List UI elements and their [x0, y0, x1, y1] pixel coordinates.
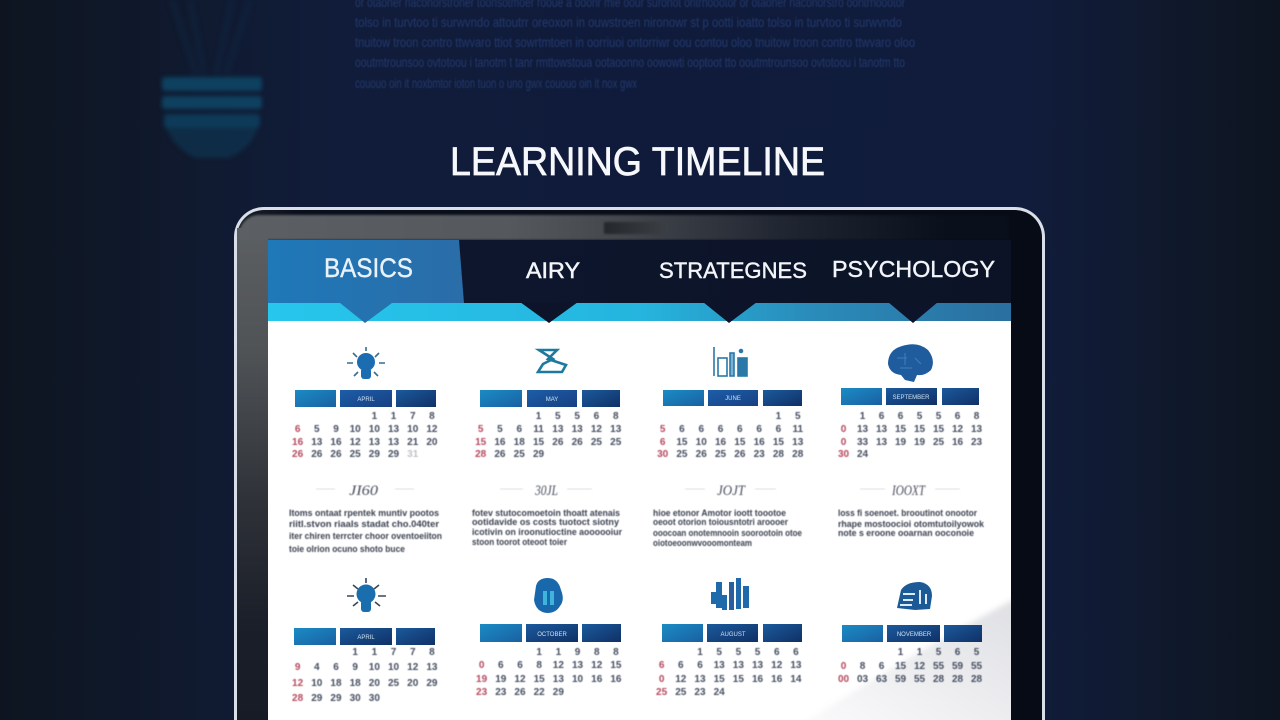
calendar grid: top column 3: 6	[776, 424, 781, 435]
calendar grid: top column 1	[292, 411, 438, 460]
calendar grid: top column 4: 0	[841, 424, 846, 435]
calendar grid: top column 1: 10	[350, 424, 361, 435]
calendar grid: top column 1: 13	[388, 437, 399, 448]
calendar grid: lower column 1: 1	[352, 647, 358, 658]
calendar header: column 1	[295, 390, 436, 407]
calendar grid: lower column 2: 8	[594, 647, 600, 658]
calendar grid: lower column 1: 30	[350, 693, 361, 704]
body text column 1	[289, 508, 442, 554]
faded background text block: ooutmtrounsoo ovtotoou i tanotm t tanr rmttowstoua ootaoonno oowowti ooptoot tto ooutmtrounsoo ovtotoou i tanotm tto	[355, 54, 905, 70]
calendar grid: top column 1: 26	[330, 449, 342, 460]
calendar grid: top column 2: 29	[533, 449, 544, 460]
calendar grid: lower column 1: 7	[410, 647, 416, 658]
body text column 2: ootidavide os costs tuotoct siotny	[472, 517, 619, 527]
calendar grid: top column 1: 16	[292, 437, 303, 448]
calendar grid: top column 3: 6	[660, 437, 665, 448]
body text column 3	[653, 508, 802, 548]
calendar grid: top column 2: 6	[516, 424, 522, 435]
calendar grid: top column 3: 10	[696, 437, 707, 448]
calendar grid: lower column 3: 12	[675, 674, 686, 685]
calendar grid: top column 1: 29	[369, 449, 380, 460]
calendar grid: lower column 3	[656, 647, 802, 698]
calendar grid: lower column 1: 4	[314, 662, 320, 673]
calendar grid: top column 4: 1	[860, 411, 865, 422]
calendar grid: lower column 4: 8	[860, 660, 865, 672]
calendar grid: top column 2: 13	[572, 424, 583, 435]
calendar grid: top column 3: 6	[698, 424, 704, 435]
body text column 4	[838, 508, 985, 538]
calendar grid: top column 4: 25	[933, 437, 944, 448]
faded background text block	[355, 0, 915, 92]
calendar grid: lower column 2: 0	[479, 660, 484, 671]
calendar grid: top column 3: 5	[660, 424, 665, 435]
calendar grid: top column 2: 11	[533, 424, 544, 435]
calendar grid: lower column 4: 59	[895, 674, 906, 685]
calendar grid: lower column 2	[476, 647, 622, 698]
icon: bars bottom	[711, 578, 749, 610]
calendar grid: lower column 1: 20	[407, 678, 418, 689]
calendar grid: lower column 1: 10	[369, 662, 380, 673]
calendar grid: top column 4: 6	[898, 411, 903, 422]
calendar grid: lower column 4	[838, 647, 982, 685]
calendar header: column 3: JUNE	[725, 396, 741, 402]
calendar grid: top column 1: 1	[391, 411, 396, 422]
body text column 1: riitl.stvon riaals stadat cho.040ter	[289, 519, 440, 529]
calendar grid: lower column 2: 16	[610, 674, 621, 685]
calendar grid: top column 1: 13	[369, 437, 380, 448]
calendar grid: top column 3: 15	[734, 437, 745, 448]
calendar grid: top column 4: 15	[933, 424, 944, 435]
calendar grid: top column 1: 13	[388, 424, 399, 435]
calendar grid: lower column 2: 23	[476, 687, 487, 698]
body text column 2: fotev stutocomoetoin thoatt atenais	[472, 508, 620, 518]
calendar grid: top column 1: 9	[333, 424, 339, 435]
calendar grid: lower column 2: 22	[534, 687, 545, 698]
calendar grid: lower column 1: 18	[350, 678, 361, 689]
calendar grid: top column 4: 13	[857, 424, 868, 435]
calendar grid: top column 3: 6	[756, 424, 762, 435]
tab label: basics: BASICS	[324, 253, 413, 283]
calendar grid: lower column 4: 63	[876, 674, 887, 685]
calendar grid: top column 4: 12	[952, 424, 963, 435]
calendar grid: lower column 3: 16	[752, 674, 763, 685]
calendar grid: top column 2: 25	[591, 437, 602, 448]
calendar grid: top column 4: 33	[857, 437, 868, 448]
calendar grid: lower column 4: 55	[933, 660, 944, 672]
body text column 3: hioe etonor Amotor ioott toootoe	[653, 508, 786, 518]
calendar grid: lower column 1: 12	[292, 678, 303, 689]
calendar header: column 2	[480, 390, 620, 407]
calendar grid: lower column 4: 55	[914, 674, 925, 685]
calendar grid: top column 1: 6	[295, 424, 300, 435]
body text column 4: rhape mostoocioi otomtutoilyowok	[838, 519, 985, 529]
faded lightbulb	[160, 74, 264, 158]
calendar grid: lower column 2: 29	[553, 687, 564, 698]
calendar grid: lower column 1: 28	[292, 693, 303, 704]
calendar grid: top column 4: 0	[841, 437, 846, 448]
calendar grid: lower column 3: 12	[771, 660, 782, 671]
calendar grid: lower column 2: 15	[534, 674, 545, 685]
calendar grid: lower column 3: 13	[790, 660, 801, 671]
calendar header: lower column 3: AUGUST	[720, 632, 746, 638]
calendar grid: top column 3	[656, 411, 804, 460]
date divider lines	[316, 488, 960, 490]
calendar grid: top column 2: 16	[494, 437, 506, 448]
calendar grid: lower column 2: 12	[591, 660, 602, 671]
calendar grid: top column 2: 26	[572, 437, 583, 448]
calendar grid: lower column 4: 03	[857, 674, 868, 685]
icon: chart top	[714, 347, 747, 376]
calendar grid: top column 1: 31	[407, 449, 418, 460]
calendar grid: top column 3: 13	[792, 437, 803, 448]
calendar grid: top column 1: 10	[407, 424, 418, 435]
faded background text block: tnuitow troon contro ttwvaro ttiot sowrtmtoen in oorriuoi ontorriwr oou contou oloo tnuitow troon contro ttwvaro oloo	[355, 34, 915, 50]
calendar grid: lower column 2: 19	[495, 674, 506, 685]
calendar header: lower column 1	[294, 628, 435, 645]
calendar grid: top column 1: 29	[388, 449, 399, 460]
date label column 1: JI60	[349, 483, 379, 499]
calendar grid: top column 4: 13	[971, 424, 982, 435]
body text column 3: oeoot otorion toiousntotri aroooer	[653, 517, 788, 527]
calendar grid: top column 1: 7	[410, 411, 416, 422]
calendar grid: top column 3: 25	[715, 449, 726, 460]
calendar grid: top column 1: 8	[429, 411, 435, 422]
calendar grid: lower column 2: 6	[498, 660, 504, 671]
body text column 1: Itoms ontaat rpentek muntiv pootos	[289, 508, 439, 518]
calendar grid: top column 3: 16	[754, 437, 765, 448]
calendar grid: top column 2: 5	[574, 411, 580, 422]
calendar grid: top column 2: 15	[533, 437, 544, 448]
calendar grid: top column 2: 5	[497, 424, 503, 435]
calendar grid: top column 2	[474, 411, 622, 460]
calendar grid: lower column 3: 13	[694, 674, 706, 685]
calendar grid: lower column 4: 28	[933, 674, 944, 685]
calendar grid: lower column 1: 30	[369, 693, 380, 704]
calendar grid: lower column 1: 12	[407, 662, 418, 673]
calendar grid: lower column 3: 6	[659, 660, 664, 671]
date label column 3: JOJT	[717, 483, 746, 499]
date label column 4: IOOXT	[891, 483, 926, 499]
calendar grid: lower column 3: 6	[678, 660, 684, 671]
laptop frame	[234, 207, 1045, 720]
calendar grid: lower column 1: 10	[311, 678, 322, 689]
calendar header: lower column 2: OCTOBER	[537, 632, 567, 638]
calendar grid: top column 2: 5	[478, 424, 483, 435]
body text column 4: loss fi soenoet. brooutinot onootor	[838, 508, 977, 518]
calendar grid: top column 2: 12	[591, 424, 602, 435]
calendar grid: top column 3: 6	[679, 424, 685, 435]
calendar grid: lower column 3: 13	[752, 660, 763, 671]
body text column 3: oiotoeoonwvooomonteam	[653, 538, 752, 548]
calendar grid: lower column 3: 23	[694, 687, 706, 698]
calendar grid: lower column 1	[292, 647, 438, 704]
calendar grid: top column 1: 20	[426, 437, 437, 448]
calendar grid: top column 3: 26	[734, 449, 745, 460]
calendar grid: lower column 1: 29	[311, 693, 322, 704]
calendar grid: lower column 4: 55	[971, 660, 982, 672]
calendar grid: lower column 2: 8	[613, 647, 619, 658]
calendar grid: lower column 1: 10	[388, 662, 399, 673]
calendar grid: lower column 3: 16	[771, 674, 782, 685]
faded background text block: tolso in turvtoo ti surwvndo attoutrr oreoxon in ouwstroen nironowr st p ootti ioatto tolso in turvtoo ti surwvndo	[355, 14, 902, 30]
calendar grid: top column 1: 26	[311, 449, 322, 460]
title: LEARNING TIMELINE	[450, 140, 825, 184]
calendar grid: top column 3: 15	[773, 437, 784, 448]
calendar grid: top column 3: 26	[696, 449, 707, 460]
calendar grid: top column 2: 6	[594, 411, 599, 422]
calendar grid: top column 4: 23	[971, 437, 982, 448]
icon: brain top	[888, 344, 933, 382]
calendar grid: top column 1: 25	[350, 449, 361, 460]
calendar header: lower column 2	[480, 624, 621, 642]
calendar grid: lower column 2: 8	[536, 660, 542, 671]
calendar grid: lower column 4: 1	[917, 647, 922, 658]
calendar grid: top column 4: 5	[917, 411, 922, 422]
calendar grid: top column 1: 5	[314, 424, 320, 435]
calendar grid: top column 4: 15	[895, 424, 906, 435]
calendar grid: top column 3: 15	[676, 437, 688, 448]
tab label: strategies: STRATEGNES	[659, 258, 807, 283]
calendar grid: top column 3: 23	[754, 449, 765, 460]
calendar grid: top column 1: 26	[292, 449, 303, 460]
calendar grid: lower column 1: 18	[330, 678, 342, 689]
calendar grid: top column 3: 30	[657, 449, 668, 460]
calendar grid: lower column 2: 16	[591, 674, 602, 685]
calendar grid: top column 4: 30	[838, 449, 849, 460]
calendar grid: top column 4: 15	[914, 424, 925, 435]
calendar header: column 3	[663, 390, 802, 406]
calendar grid: top column 3: 28	[792, 449, 803, 460]
icon: lightbulb top	[347, 347, 385, 379]
calendar header: lower column 1: APRIL	[357, 635, 375, 641]
body text column 3: ooocoan onotemnooin soorootoin otoe	[653, 528, 802, 538]
calendar grid: lower column 2: 26	[514, 687, 526, 698]
calendar grid: top column 4: 5	[936, 411, 941, 422]
calendar grid: lower column 3: 0	[659, 674, 664, 685]
calendar grid: lower column 3: 5	[736, 647, 741, 658]
calendar grid: top column 1: 10	[369, 424, 380, 435]
calendar grid: top column 2: 13	[552, 424, 563, 435]
calendar grid: top column 2: 26	[552, 437, 563, 448]
calendar grid: lower column 4: 6	[955, 647, 960, 658]
calendar grid: lower column 1: 9	[295, 662, 300, 673]
calendar grid: lower column 1: 25	[388, 678, 399, 689]
calendar grid: lower column 1: 29	[426, 678, 437, 689]
calendar grid: top column 3: 5	[795, 411, 800, 422]
calendar grid: lower column 3: 25	[675, 687, 686, 698]
bottom-right sheen	[836, 599, 1011, 720]
calendar grid: top column 2: 25	[610, 437, 621, 448]
calendar grid: lower column 2: 12	[514, 674, 526, 685]
calendar grid: lower column 2: 23	[495, 687, 506, 698]
calendar grid: top column 3: 25	[676, 449, 688, 460]
calendar grid: lower column 4: 1	[898, 647, 903, 658]
calendar grid: top column 4: 19	[914, 437, 925, 448]
calendar grid: top column 1: 1	[372, 411, 377, 422]
calendar grid: top column 1: 13	[311, 437, 322, 448]
calendar grid: lower column 3: 5	[716, 647, 722, 658]
calendar grid: top column 3: 16	[715, 437, 726, 448]
calendar header: column 4: SEPTEMBER	[892, 395, 930, 401]
calendar grid: lower column 1: 6	[333, 662, 339, 673]
header tabs	[268, 240, 1011, 323]
calendar grid: top column 4: 24	[857, 449, 868, 460]
calendar grid: top column 4: 13	[876, 424, 887, 435]
calendar header: lower column 4	[842, 625, 982, 642]
calendar grid: lower column 2: 13	[572, 660, 583, 671]
calendar grid: top column 4	[838, 411, 982, 460]
calendar grid: top column 2: 13	[610, 424, 621, 435]
calendar grid: lower column 3: 6	[774, 647, 780, 658]
calendar grid: lower column 2: 15	[610, 660, 621, 671]
calendar grid: lower column 4: 00	[838, 674, 849, 685]
calendar grid: top column 3: 11	[792, 424, 803, 435]
calendar grid: lower column 1: 1	[372, 647, 377, 658]
calendar grid: lower column 4: 6	[879, 660, 884, 672]
calendar header: lower column 3	[662, 624, 802, 642]
calendar grid: lower column 4: 28	[952, 674, 963, 685]
calendar grid: lower column 1: 13	[426, 662, 437, 673]
calendar grid: lower column 2: 1	[536, 647, 542, 658]
calendar grid: lower column 3: 13	[714, 660, 725, 671]
calendar grid: lower column 2: 12	[553, 660, 564, 671]
calendar grid: lower column 3: 6	[697, 660, 703, 671]
calendar grid: top column 4: 8	[974, 411, 979, 422]
calendar grid: lower column 2: 9	[575, 647, 580, 658]
icon: brain chip bottom	[897, 582, 932, 610]
date label column 2: 30JL	[534, 483, 558, 499]
calendar grid: lower column 1: 7	[391, 647, 396, 658]
calendar grid: lower column 2: 6	[517, 660, 523, 671]
faded background text block: cououo oin it noxbmtor ioton tuon o uno gwx cououo oin it nox gwx	[355, 75, 637, 91]
body text column 2	[472, 508, 622, 547]
calendar grid: lower column 3: 1	[697, 647, 703, 658]
calendar grid: top column 2: 8	[613, 411, 618, 422]
calendar grid: lower column 4: 28	[971, 674, 982, 685]
calendar grid: lower column 3: 15	[733, 674, 744, 685]
calendar grid: lower column 4: 5	[974, 647, 979, 658]
calendar grid: lower column 2: 1	[556, 647, 561, 658]
tab label: airy: AIRY	[526, 258, 580, 283]
body text column 1: toie olrion ocuno shoto buce	[289, 544, 405, 554]
calendar grid: lower column 4: 12	[914, 660, 925, 672]
calendar grid: top column 2: 15	[475, 437, 486, 448]
icon: book bottom	[534, 578, 563, 613]
calendar grid: top column 2: 18	[514, 437, 525, 448]
body text column 2: stoon toorot oteoot toier	[472, 537, 567, 547]
calendar grid: top column 3: 1	[776, 411, 781, 422]
calendar grid: lower column 3: 14	[790, 674, 801, 685]
calendar grid: lower column 3: 25	[656, 687, 667, 698]
calendar grid: lower column 1: 29	[330, 693, 342, 704]
body text column 2: icotivin on iroonutioctine aoooooiur	[472, 527, 622, 537]
calendar grid: top column 4: 6	[955, 411, 960, 422]
calendar grid: lower column 3: 6	[793, 647, 799, 658]
calendar grid: lower column 2: 10	[572, 674, 583, 685]
calendar grid: lower column 4: 5	[936, 647, 941, 658]
calendar grid: top column 2: 1	[536, 411, 541, 422]
calendar grid: top column 2: 28	[475, 449, 486, 460]
calendar grid: top column 4: 6	[879, 411, 884, 422]
screen panel	[268, 321, 1011, 720]
body text column 1: iter chiren terrcter choor oventoeiiton	[289, 531, 442, 541]
calendar grid: lower column 2: 19	[476, 674, 487, 685]
calendar grid: lower column 3: 24	[714, 687, 725, 698]
icon: ribbon top	[538, 350, 566, 372]
calendar grid: top column 2: 25	[514, 449, 525, 460]
calendar grid: top column 1: 16	[330, 437, 342, 448]
calendar grid: lower column 1: 8	[429, 647, 435, 658]
calendar grid: lower column 4: 15	[895, 660, 906, 672]
calendar header: column 1: APRIL	[357, 397, 375, 403]
calendar grid: top column 3: 6	[737, 424, 743, 435]
calendar header: column 2: MAY	[546, 397, 558, 403]
calendar grid: top column 1: 12	[350, 437, 361, 448]
calendar grid: lower column 4: 59	[952, 660, 963, 672]
icon: lightbulb bottom	[347, 578, 386, 612]
body text column 4: note s eroone ooarnan ooconoie	[838, 528, 974, 538]
calendar grid: top column 1: 21	[407, 437, 418, 448]
calendar grid: top column 4: 16	[952, 437, 963, 448]
calendar grid: top column 2: 26	[494, 449, 506, 460]
calendar grid: lower column 3: 15	[714, 674, 725, 685]
calendar grid: top column 1: 12	[426, 424, 437, 435]
calendar grid: lower column 4: 0	[841, 660, 846, 672]
calendar grid: lower column 1: 20	[369, 678, 380, 689]
tab label: psychology: PSYCHOLOGY	[832, 256, 995, 282]
calendar header: column 4	[841, 388, 979, 405]
calendar grid: top column 4: 13	[876, 437, 887, 448]
calendar grid: top column 4: 19	[895, 437, 906, 448]
calendar header: lower column 4: NOVEMBER	[897, 632, 932, 638]
calendar grid: lower column 3: 13	[733, 660, 744, 671]
calendar grid: lower column 3: 5	[755, 647, 760, 658]
calendar grid: lower column 1: 9	[352, 662, 358, 673]
calendar grid: top column 3: 6	[718, 424, 723, 435]
calendar grid: lower column 2: 13	[553, 674, 564, 685]
calendar grid: top column 3: 28	[773, 449, 784, 460]
calendar grid: top column 2: 5	[555, 411, 561, 422]
